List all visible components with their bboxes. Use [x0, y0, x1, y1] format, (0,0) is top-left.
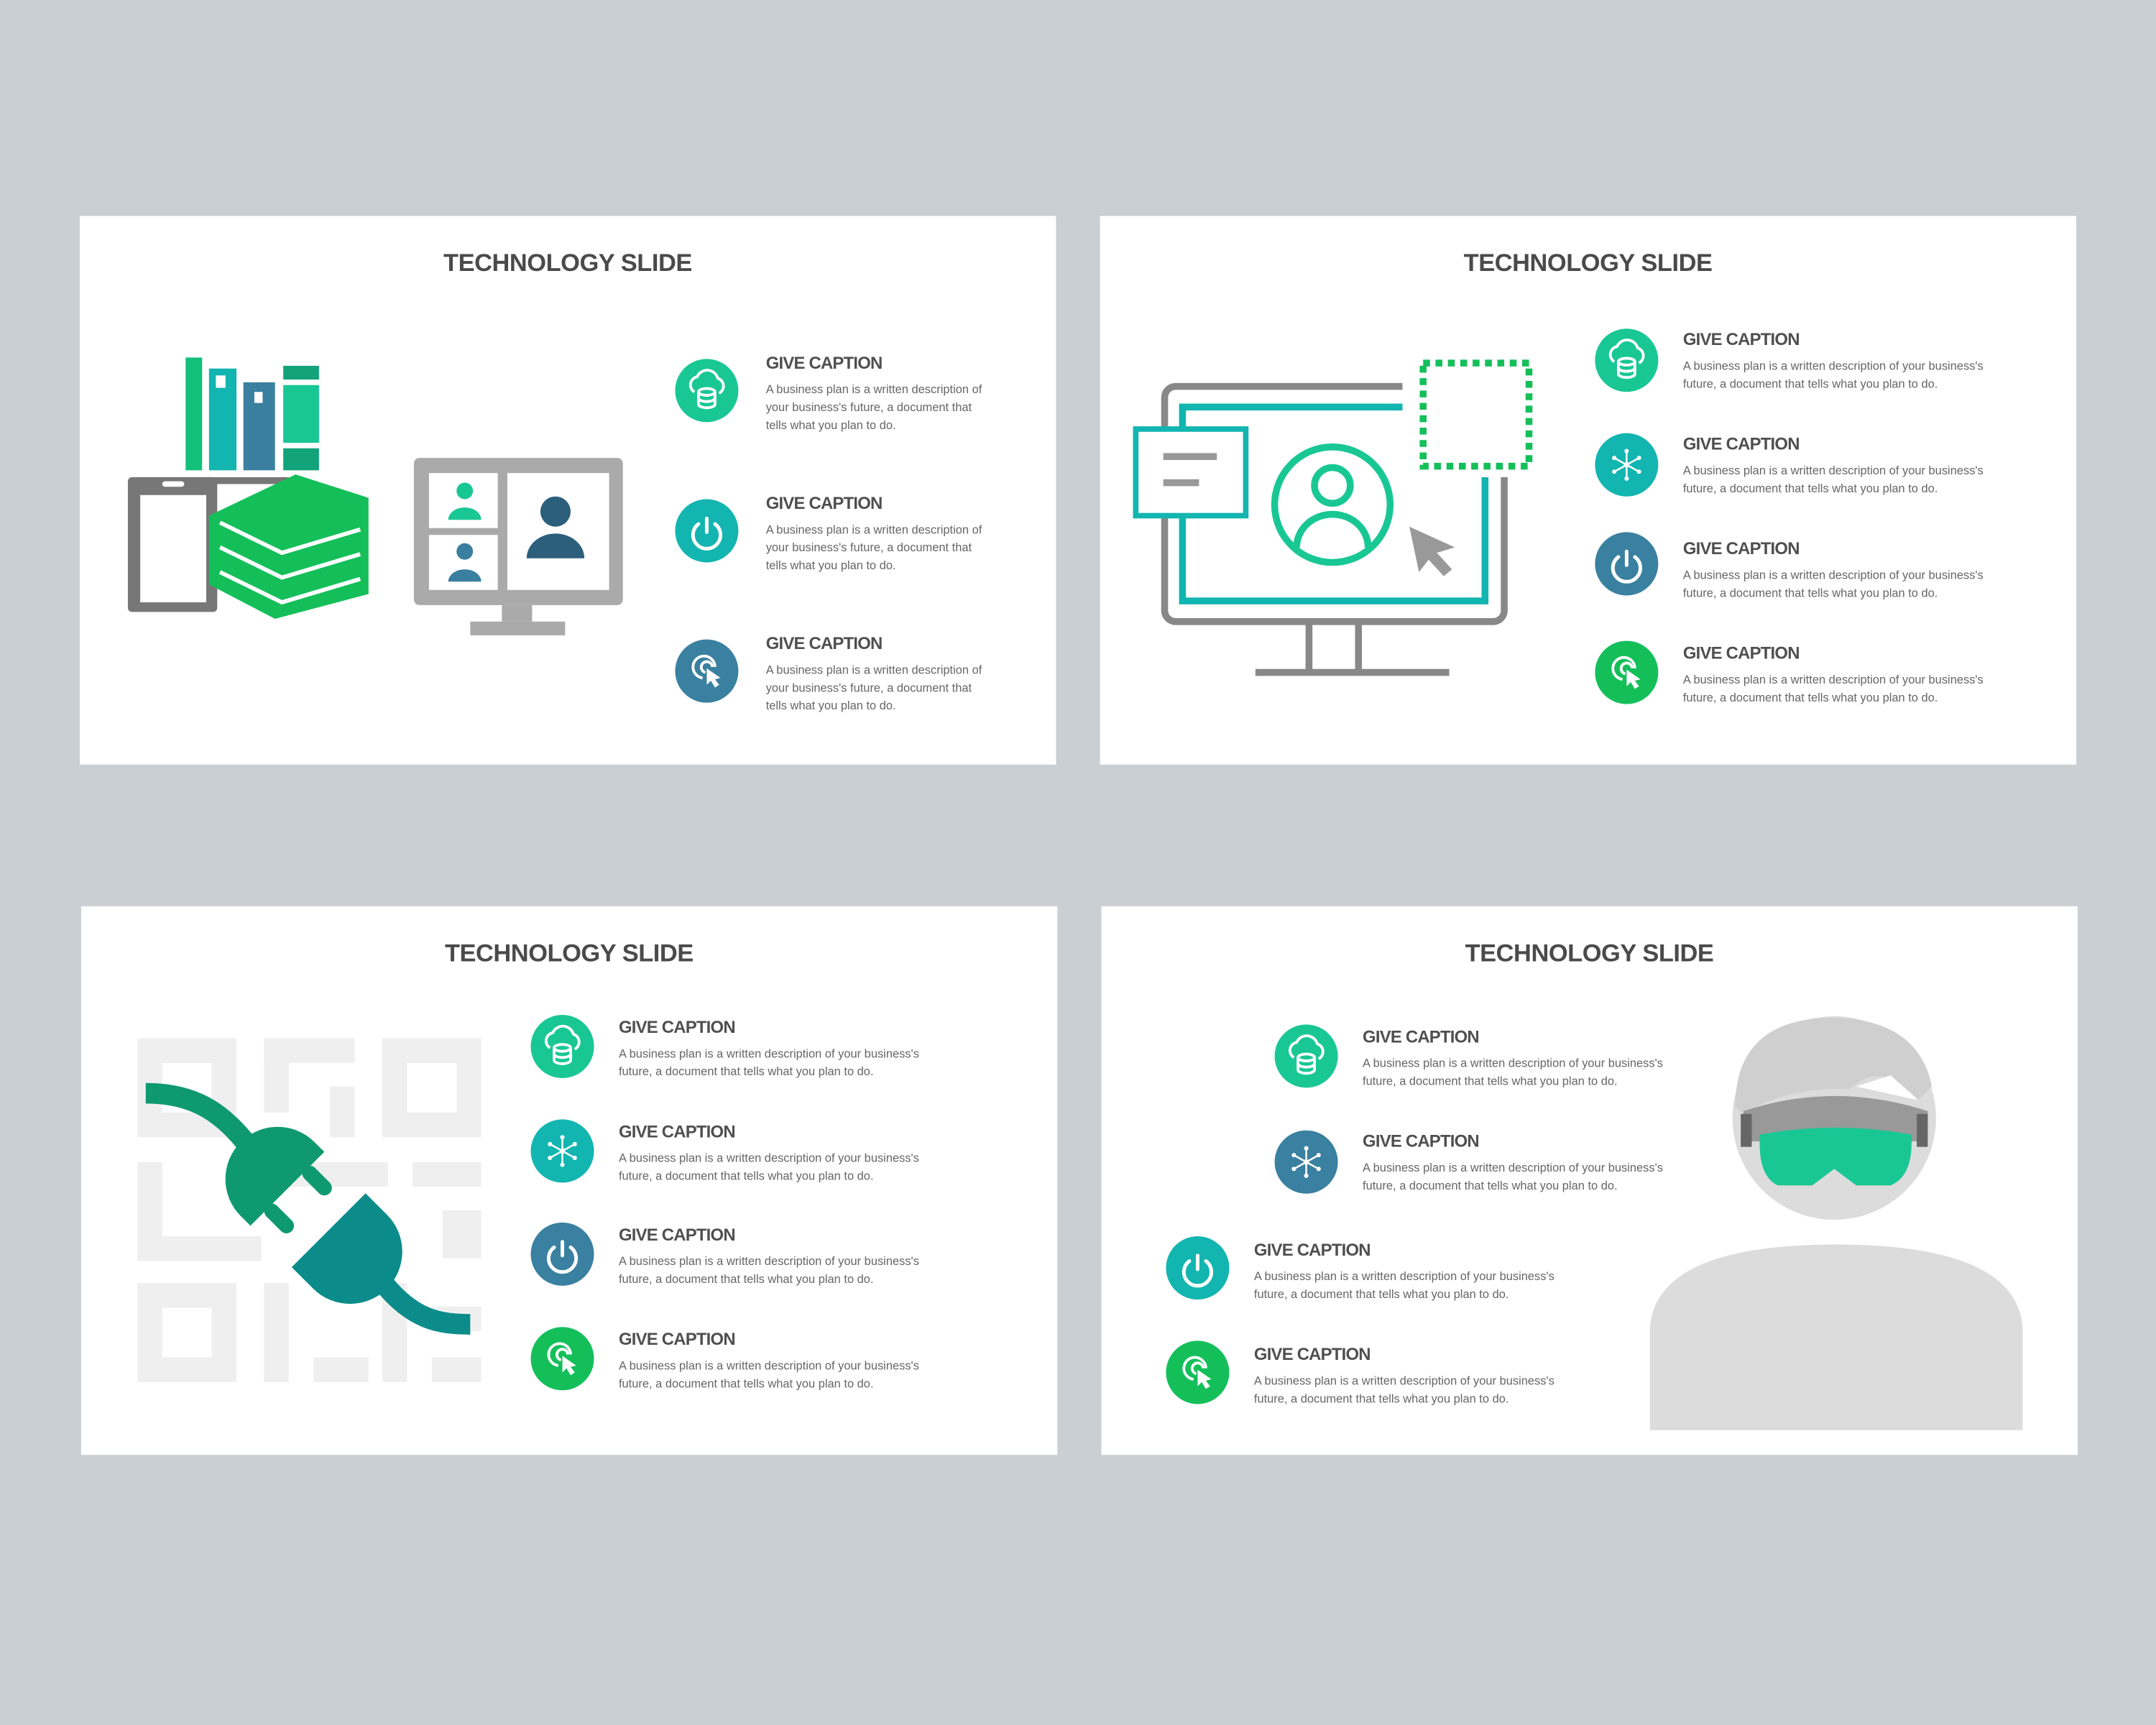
item 2: A business plan is a written description of [766, 523, 982, 536]
illustration: books, tablet, video call monitor [128, 357, 623, 635]
panel: bottom-right slide: A business plan is a written description of your business's [1363, 1162, 1663, 1174]
items: GIVE CAPTION [1363, 1027, 1480, 1046]
panel: top-right slide: A business plan is a written description of your business's [1683, 569, 1984, 581]
items: GIVE CAPTION [619, 1018, 736, 1037]
panel: top-left slide [80, 216, 1056, 765]
items: GIVE CAPTION [1683, 330, 1800, 349]
panel: bottom-left slide [81, 906, 1057, 1455]
panel: bottom-left slide: GIVE CAPTION [619, 1122, 736, 1141]
panel: top-right slide: future, a document that tells what you plan to do. [1683, 691, 1938, 704]
panel: bottom-right slide: A business plan is a written description of your business's [1254, 1270, 1554, 1283]
panel: bottom-left slide: A business plan is a written description of your business's [619, 1152, 919, 1165]
items: A business plan is a written description of your business's [1363, 1057, 1663, 1070]
item 2 [675, 494, 982, 572]
item 1: A business plan is a written description of [766, 383, 982, 396]
panel: bottom-right slide: future, a document that tells what you plan to do. [1363, 1179, 1618, 1192]
panel: top-right slide: future, a document that tells what you plan to do. [1683, 586, 1938, 599]
panel: top-right slide: GIVE CAPTION [1683, 539, 1800, 558]
panel: bottom-left slide: GIVE CAPTION [619, 1225, 736, 1245]
panel: bottom-left slide: A business plan is a written description of your business's [619, 1360, 919, 1373]
items [1595, 328, 1984, 392]
panel: bottom-right slide: future, a document that tells what you plan to do. [1254, 1393, 1508, 1406]
items: A business plan is a written description of your business's [619, 1047, 919, 1060]
panel: top-right slide: GIVE CAPTION [1683, 435, 1800, 454]
item 2: GIVE CAPTION [766, 494, 883, 513]
panel: bottom-right slide [1102, 906, 2078, 1455]
items: future, a document that tells what you plan to do. [1363, 1075, 1618, 1088]
item 2: your business's future, a document that [766, 541, 972, 554]
illustration: QR code with plugs [137, 1039, 482, 1382]
item 1 [675, 354, 982, 432]
panel: top-right slide: A business plan is a written description of your business's [1683, 673, 1984, 686]
title: top-left: TECHNOLOGY SLIDE [443, 249, 692, 277]
items [1275, 1024, 1663, 1088]
item 3: GIVE CAPTION [766, 634, 883, 653]
illustration: monitor with profile [1135, 360, 1540, 673]
item 1: your business's future, a document that [766, 401, 972, 414]
item 2: tells what you plan to do. [766, 559, 896, 572]
panel: top-right slide: future, a document that tells what you plan to do. [1683, 482, 1938, 495]
title: bottom-right: TECHNOLOGY SLIDE [1465, 939, 1714, 967]
title: top-right: TECHNOLOGY SLIDE [1464, 249, 1713, 277]
panel: bottom-right slide: GIVE CAPTION [1254, 1345, 1371, 1364]
items [531, 1015, 919, 1078]
panel: bottom-left slide: GIVE CAPTION [619, 1330, 736, 1349]
item 3: A business plan is a written description of [766, 663, 982, 676]
panel: bottom-right slide: future, a document that tells what you plan to do. [1254, 1288, 1508, 1301]
panel: bottom-right slide: A business plan is a written description of your business's [1254, 1375, 1554, 1388]
item 1: GIVE CAPTION [766, 354, 883, 373]
item 3: your business's future, a document that [766, 681, 972, 694]
item 1: tells what you plan to do. [766, 419, 896, 432]
panel: top-right slide: A business plan is a written description of your business's [1683, 464, 1984, 477]
panel: bottom-left slide: future, a document that tells what you plan to do. [619, 1273, 874, 1286]
panel: bottom-left slide: A business plan is a written description of your business's [619, 1255, 919, 1268]
panel: top-right slide [1100, 216, 2076, 765]
panel: bottom-left slide: future, a document that tells what you plan to do. [619, 1170, 874, 1183]
items: future, a document that tells what you plan to do. [1683, 378, 1938, 391]
item 3 [675, 634, 982, 712]
title: bottom-left: TECHNOLOGY SLIDE [445, 939, 694, 967]
panel: top-right slide: GIVE CAPTION [1683, 643, 1800, 663]
items: A business plan is a written description of your business's [1683, 360, 1984, 373]
panel: bottom-left slide: future, a document that tells what you plan to do. [619, 1377, 874, 1390]
panel: bottom-right slide: GIVE CAPTION [1254, 1241, 1371, 1260]
panel: bottom-right slide: GIVE CAPTION [1363, 1132, 1480, 1151]
item 3: tells what you plan to do. [766, 699, 896, 712]
illustration: person with VR goggles [1650, 1016, 2022, 1430]
items: future, a document that tells what you plan to do. [619, 1065, 874, 1078]
